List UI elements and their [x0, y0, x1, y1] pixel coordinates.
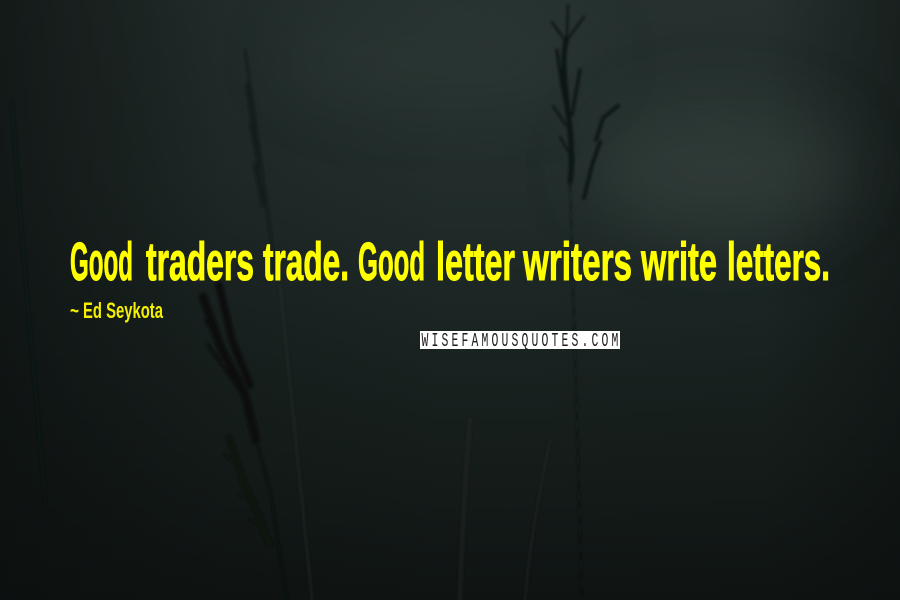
grass silhouettes [12, 5, 618, 600]
grass stalk: far left [12, 100, 45, 500]
quote text: trade. [263, 232, 349, 292]
grass stalk: left large seed head [203, 285, 287, 600]
grass stalk: upper left [245, 50, 275, 270]
quote text [70, 232, 830, 292]
quote text: Good [70, 232, 133, 292]
watermark badge: WISEFAMOUSQUOTES.COM [422, 330, 621, 352]
quote text: write [640, 232, 717, 292]
author attribution: Ed Seykota [83, 298, 164, 323]
quote text: Good [358, 232, 425, 292]
quote text: letter [436, 232, 515, 292]
quote text: writers [522, 232, 632, 292]
author attribution: ~ [70, 298, 79, 323]
grass stalk: pale stems [280, 285, 550, 600]
author attribution [70, 298, 164, 323]
grass stalk: top centre seed head [552, 5, 618, 600]
quote text: letters. [727, 232, 830, 292]
quote text: traders [146, 232, 254, 292]
grass stalk: lower left seed head [225, 438, 270, 545]
